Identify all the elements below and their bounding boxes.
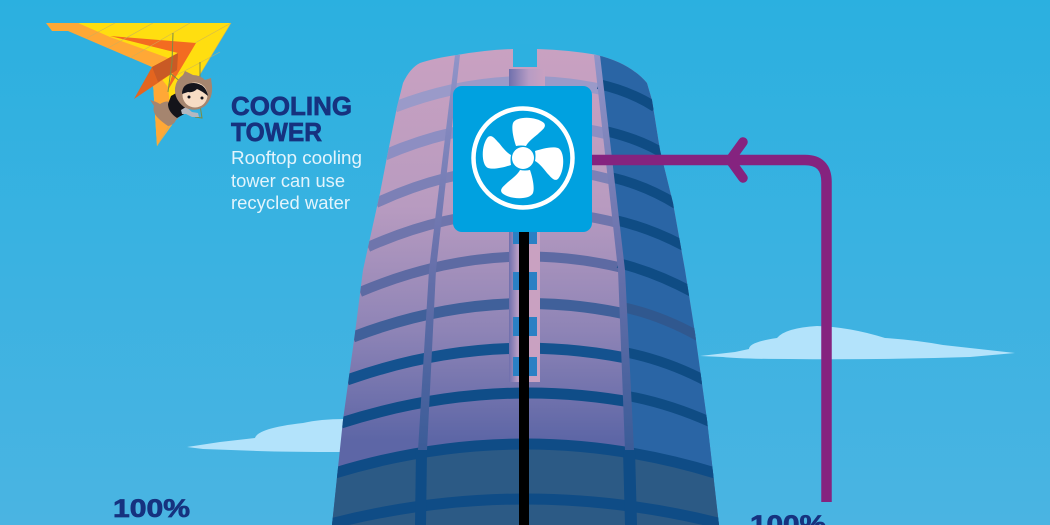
mascot hands — [181, 107, 199, 117]
vertical rib left lower — [415, 450, 427, 525]
glider lower keel — [152, 67, 172, 146]
right side dark bands — [598, 84, 710, 422]
mascot face — [182, 82, 208, 108]
stat left: 100% — [113, 495, 190, 523]
tower shaded right side — [598, 55, 714, 480]
column window 3 — [513, 317, 537, 336]
description text — [231, 148, 362, 213]
column top shading — [509, 69, 545, 87]
glider orange panel — [110, 36, 196, 90]
description line 2: tower can use — [231, 171, 345, 191]
glider yellow sail — [78, 23, 231, 146]
vertical rib right upper — [594, 55, 634, 450]
purple flow arrow — [730, 142, 743, 178]
heading line 2: TOWER — [231, 117, 322, 147]
column window 2 — [513, 272, 537, 290]
mascot eyes — [188, 96, 204, 100]
fan ring — [474, 108, 572, 208]
cloud right — [700, 326, 1015, 359]
glider fold — [134, 53, 178, 99]
mascot hair — [182, 83, 208, 96]
vertical rib right lower — [623, 450, 637, 525]
tower lower dark section — [325, 444, 725, 525]
cloud left — [187, 419, 345, 452]
mascot black vest — [168, 92, 188, 118]
floor bands — [341, 81, 708, 423]
heading line 1: COOLING — [231, 91, 352, 121]
purple return pipe — [590, 160, 826, 502]
tower lit face — [320, 40, 730, 525]
glider dark fold — [152, 53, 178, 82]
mascot hood — [175, 71, 212, 110]
column body — [509, 69, 540, 382]
glider rigging — [87, 23, 231, 146]
column window 1 — [513, 232, 537, 244]
fan tile — [453, 86, 592, 232]
fan blades — [483, 118, 563, 198]
central column — [509, 44, 545, 382]
black pipe — [519, 230, 529, 525]
vertical rib left upper — [418, 55, 460, 450]
lower floor bands — [330, 444, 722, 524]
description line 1: Rooftop cooling — [231, 148, 362, 168]
column window 4 — [513, 357, 537, 376]
fan hub — [512, 147, 534, 169]
heading: cooling tower — [231, 91, 352, 147]
tower — [320, 40, 730, 525]
harness lines — [168, 33, 202, 118]
column left shading — [509, 87, 525, 382]
description line 3: recycled water — [231, 193, 350, 213]
hang glider with mascot — [46, 23, 231, 146]
mascot tail and body — [150, 100, 180, 126]
icon: cooling fan — [453, 86, 592, 232]
roof notch — [513, 44, 537, 67]
glider left wing strip — [46, 23, 168, 67]
